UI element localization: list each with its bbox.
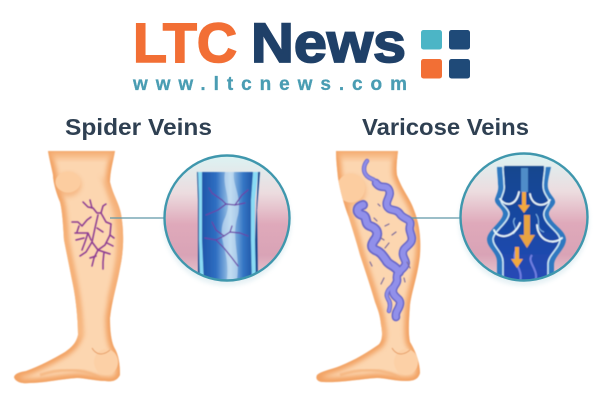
vessel body <box>487 167 566 285</box>
illustration: left leg <box>14 151 126 383</box>
logo wordmark: News: News <box>251 11 406 74</box>
inset circle: spider vein close-up <box>163 156 291 286</box>
highlight <box>521 168 528 192</box>
arrows <box>511 192 535 268</box>
connector line <box>110 217 165 219</box>
inset circle: varicose vein close-up <box>459 154 589 286</box>
spider veins on leg <box>72 200 114 269</box>
connector line <box>411 217 461 219</box>
vessel top cap <box>504 165 544 169</box>
logo url: www.ltcnews.com <box>132 74 407 95</box>
valves <box>494 192 562 242</box>
heading: Varicose Veins: Varicose Veins <box>362 114 529 140</box>
logo wordmark: LTC: LTC <box>133 11 237 74</box>
heading: Spider Veins: Spider Veins <box>65 114 212 140</box>
panel: spider veins <box>14 151 291 383</box>
varicose veins on leg <box>358 161 412 317</box>
illustration: right leg <box>316 151 420 382</box>
logo <box>132 11 470 95</box>
logo icon: four squares <box>421 30 470 78</box>
panel: varicose veins <box>316 151 589 382</box>
